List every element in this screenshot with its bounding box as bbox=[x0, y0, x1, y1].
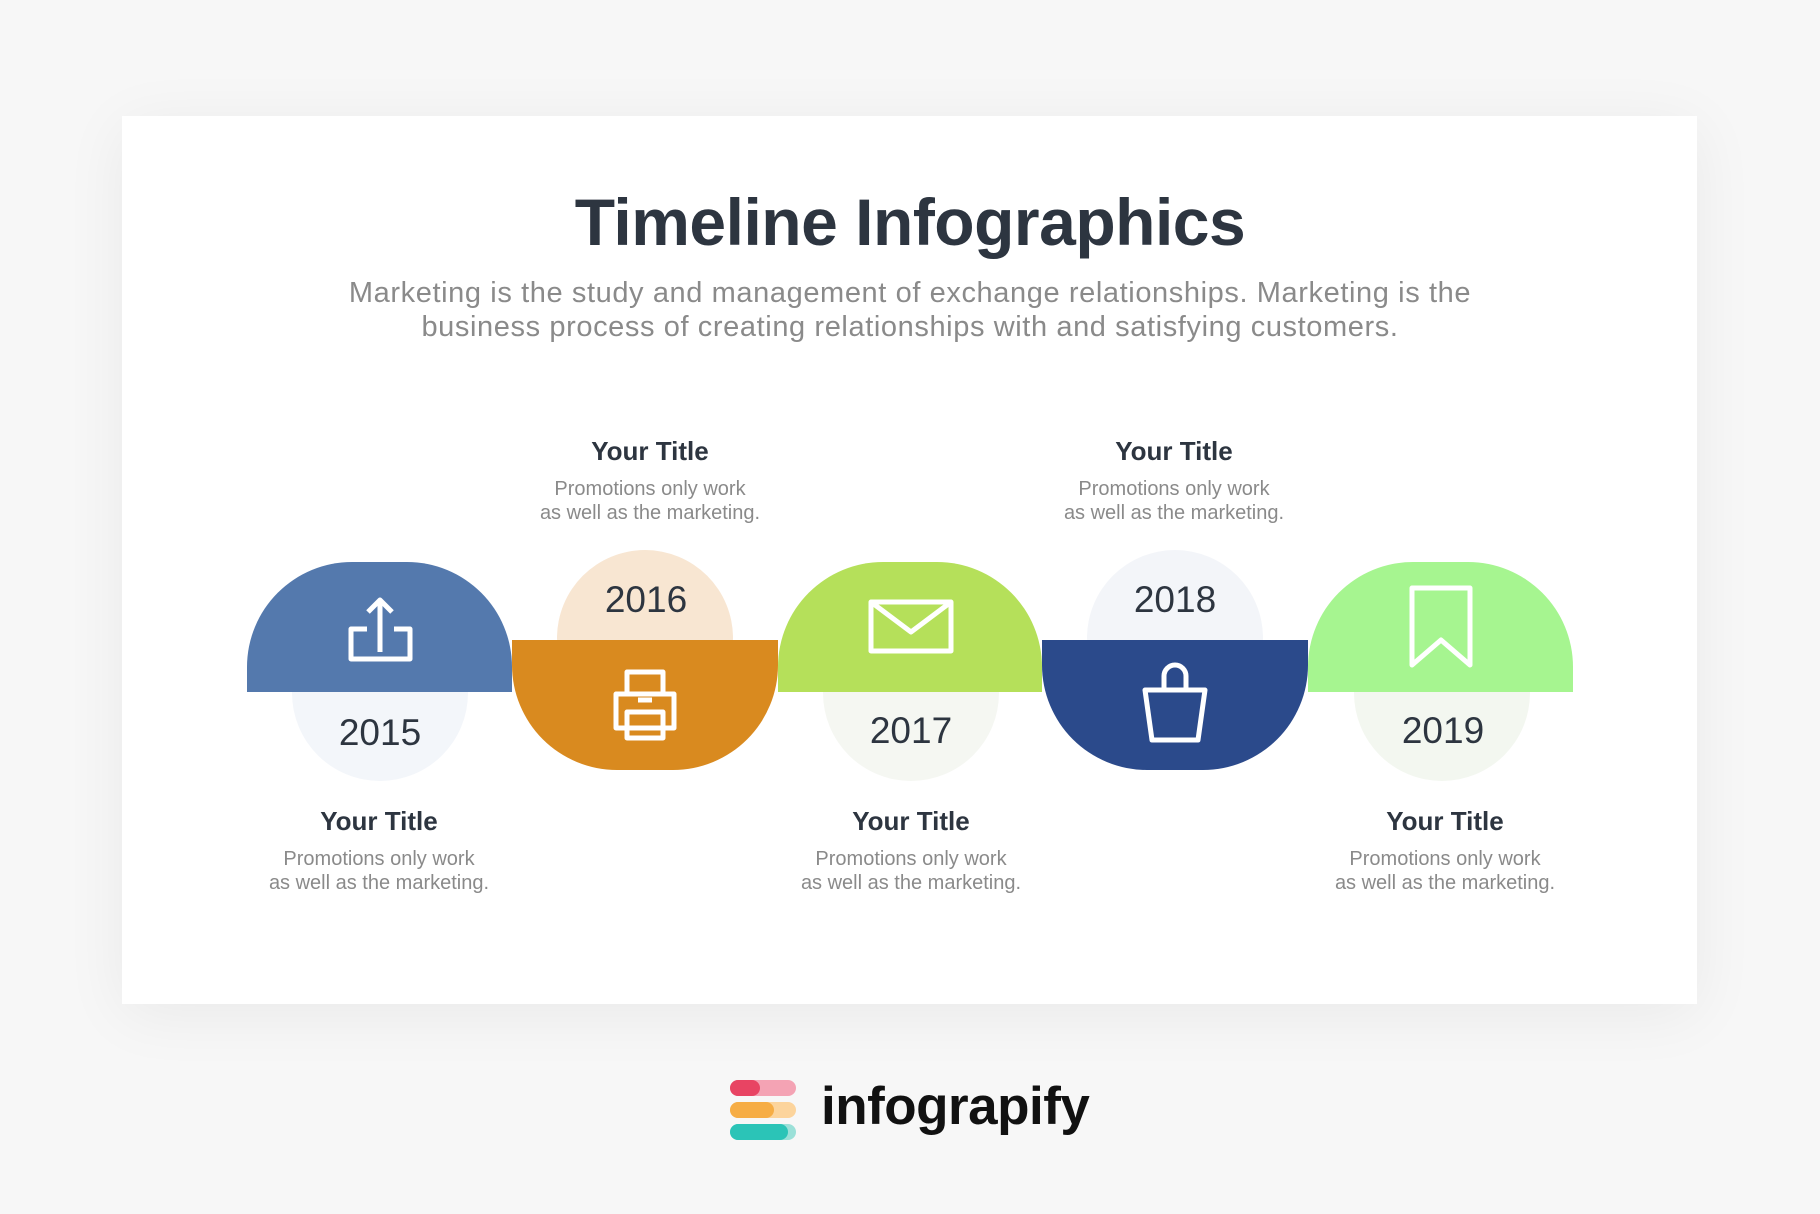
segment 2016 orange bbox=[512, 640, 778, 770]
text block 2016: as well as the marketing. bbox=[540, 502, 760, 524]
text block 2016 bbox=[540, 436, 760, 524]
text block 2015: Promotions only work bbox=[283, 848, 475, 870]
text block 2018: Your Title bbox=[1115, 436, 1233, 466]
year labels: 2015 bbox=[339, 712, 421, 753]
text block 2015 bbox=[269, 806, 489, 894]
icon: bookmark bbox=[1412, 588, 1470, 665]
text block 2019 bbox=[1335, 806, 1555, 894]
text block 2017: Your Title bbox=[852, 806, 970, 836]
text block 2018: Promotions only work bbox=[1078, 478, 1270, 500]
text block 2017: as well as the marketing. bbox=[801, 872, 1021, 894]
year labels: 2018 bbox=[1134, 579, 1216, 620]
text block 2019: as well as the marketing. bbox=[1335, 872, 1555, 894]
text block 2016: Your Title bbox=[591, 436, 709, 466]
logo icon bbox=[730, 1080, 796, 1140]
text block 2019: Your Title bbox=[1386, 806, 1504, 836]
year circles bbox=[292, 550, 1530, 781]
card panel bbox=[122, 116, 1697, 1004]
subtitle: business process of creating relationships with and satisfying customers. bbox=[421, 311, 1399, 343]
text block 2015: Your Title bbox=[320, 806, 438, 836]
segment 2017 green bbox=[778, 562, 1042, 692]
segment 2015 blue bbox=[247, 562, 512, 692]
icon: bag bbox=[1145, 665, 1205, 740]
subtitle: Marketing is the study and management of exchange relationships. Marketing is the bbox=[349, 277, 1471, 309]
title: Timeline Infographics bbox=[575, 185, 1245, 259]
logo text: infograpify bbox=[821, 1077, 1089, 1136]
segment 2018 navy bbox=[1042, 640, 1308, 770]
logo bbox=[730, 1077, 1090, 1140]
segment 2019 light green bbox=[1308, 562, 1573, 692]
icon: envelope bbox=[871, 602, 951, 651]
text block 2017: Promotions only work bbox=[815, 848, 1007, 870]
icon: share bbox=[351, 600, 410, 659]
year labels: 2017 bbox=[870, 710, 952, 751]
text block 2019: Promotions only work bbox=[1349, 848, 1541, 870]
icon: printer bbox=[616, 672, 674, 738]
subtitle bbox=[349, 277, 1471, 343]
year labels: 2019 bbox=[1402, 710, 1484, 751]
text block 2018: as well as the marketing. bbox=[1064, 502, 1284, 524]
text block 2015: as well as the marketing. bbox=[269, 872, 489, 894]
text block 2016: Promotions only work bbox=[554, 478, 746, 500]
text block 2017 bbox=[801, 806, 1021, 894]
year labels bbox=[339, 579, 1484, 753]
text block 2018 bbox=[1064, 436, 1284, 524]
year labels: 2016 bbox=[605, 579, 687, 620]
